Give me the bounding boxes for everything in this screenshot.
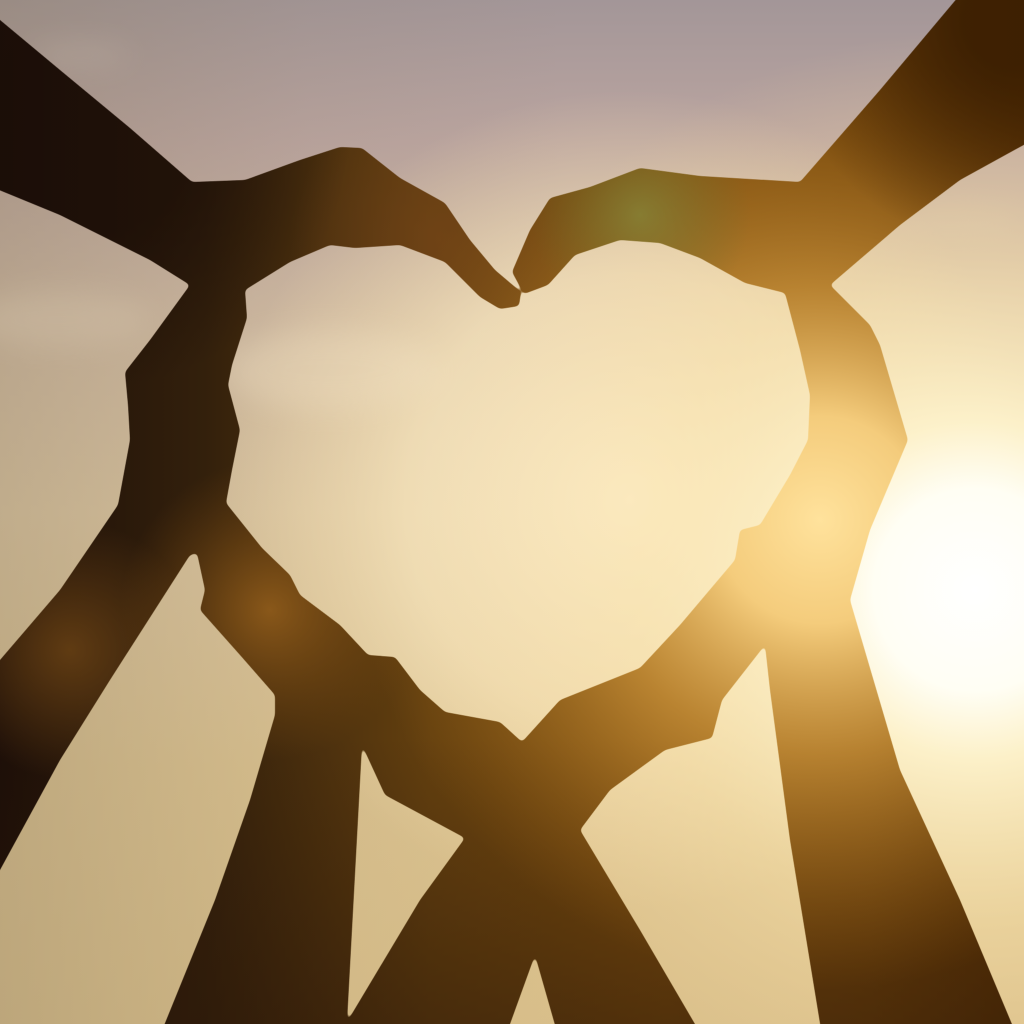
clouds: soft haze xyxy=(0,43,1020,410)
